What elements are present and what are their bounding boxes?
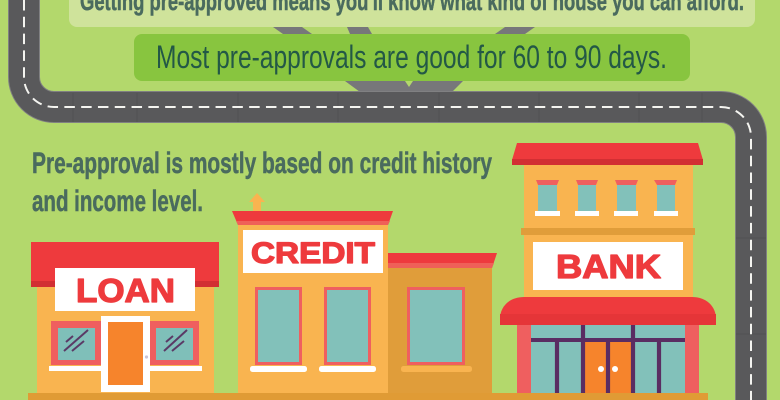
building: credit [232,193,393,393]
text panel: pre-approval meaning [69,0,755,27]
road connector pieces [273,27,535,92]
icon: roof arrow [249,193,265,211]
sign: credit: CREDIT [251,237,375,270]
building: loan [31,242,219,393]
upper windows [535,180,678,216]
awning [500,297,716,325]
text panel: pre-approval duration [134,34,690,81]
ground strip [28,393,708,400]
text block: credit and income: and income level. [32,185,203,218]
building: credit annex [388,253,497,393]
text block: credit and income: Pre-approval is mostly based on credit history [32,147,492,180]
storefront [517,325,699,393]
text block: credit and income [32,147,492,218]
sign: bank: BANK [556,248,661,285]
sign: loan: LOAN [76,272,175,309]
building: bank [500,143,716,393]
